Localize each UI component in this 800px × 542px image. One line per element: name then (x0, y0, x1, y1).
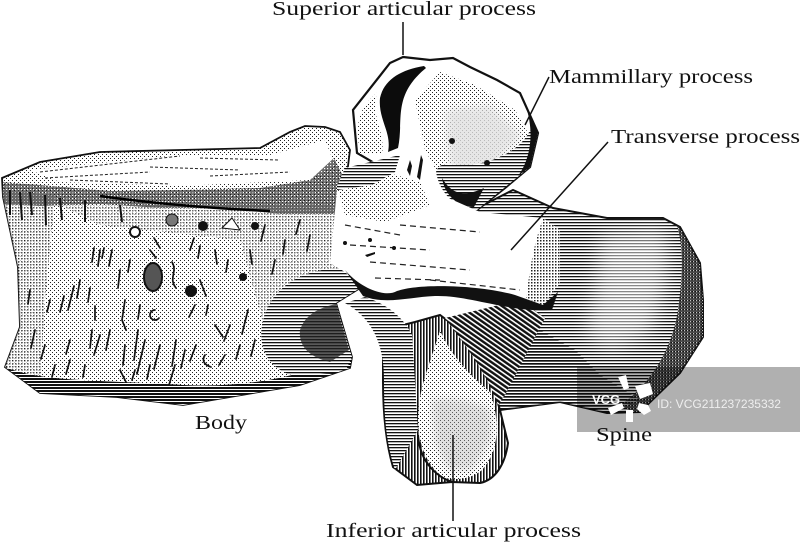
superior articular process (353, 57, 538, 210)
left strip joining body (337, 155, 400, 190)
leader lines (403, 22, 608, 521)
superior facet dark groove (380, 66, 426, 152)
watermark band (577, 367, 800, 432)
label: spine: Spine (596, 425, 652, 446)
lateral facet hatching (358, 92, 383, 154)
right dark outline (518, 96, 538, 176)
articular facet (418, 330, 497, 479)
soft light patch on spine (585, 228, 668, 350)
vertical pits (28, 220, 310, 385)
label: body: Body (195, 413, 247, 434)
pedicle lower edge (345, 270, 558, 310)
top rim of body (30, 140, 335, 186)
watermark logo (592, 375, 653, 422)
watermark id: ID: VCG211237235332 (657, 397, 781, 411)
shadow under rim (0, 158, 350, 214)
label: transverse process: Transverse process (611, 127, 800, 148)
shaded underside of spine (499, 331, 640, 411)
watermark logo: VCG (592, 392, 620, 407)
lower shaded fold (436, 130, 538, 210)
nutrient foramina (130, 214, 259, 297)
body side shading (0, 190, 55, 385)
label: inferior articular process: Inferior articular process (326, 521, 581, 542)
labels (195, 0, 800, 542)
shaded cap (415, 72, 532, 195)
hatched arch under pedicle (345, 297, 418, 470)
shaded curve at pedicle root (261, 268, 358, 375)
label: mammillary process: Mammillary process (549, 67, 753, 88)
dark band beside facet (445, 300, 545, 405)
bottom rim shadow (6, 353, 352, 405)
hatched transverse tip (526, 218, 560, 305)
dark right edge of spine (622, 226, 703, 412)
vertebral body (0, 126, 370, 408)
noisy pedicle root (338, 172, 430, 222)
central hatch of facet (432, 398, 492, 470)
inferior articular process (383, 300, 545, 485)
pedicle strokes (345, 225, 520, 290)
spine and lamina (460, 190, 708, 416)
pedicle and transverse process (330, 138, 560, 470)
